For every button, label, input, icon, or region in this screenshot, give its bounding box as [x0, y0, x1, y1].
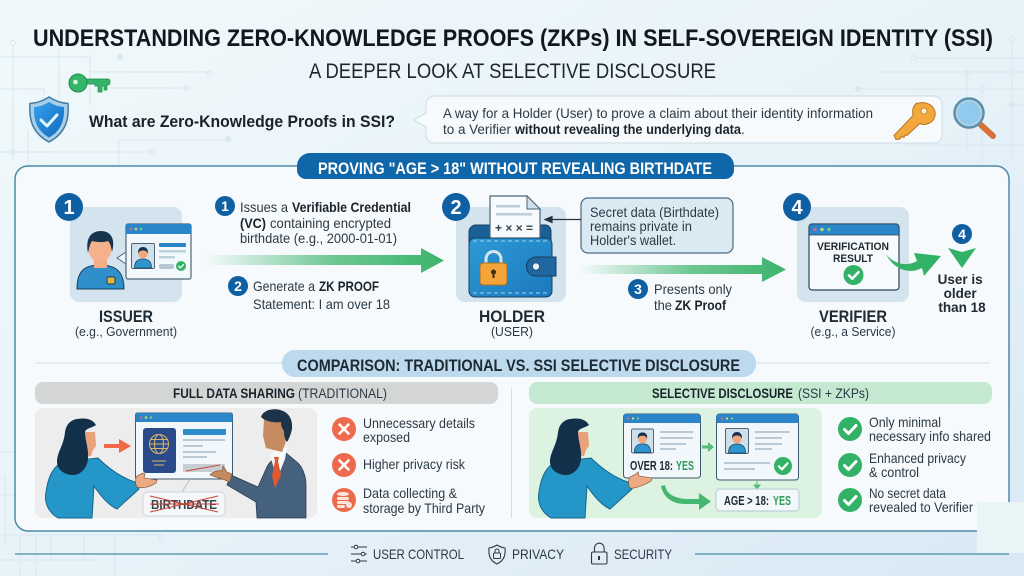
item: minimal info: necessary info shared [869, 428, 991, 444]
step 1 text: Verifiable Credential [292, 199, 411, 215]
small arrow across [702, 442, 714, 452]
verifier label: VERIFIER [819, 308, 887, 326]
definition text: . [741, 121, 745, 137]
item: unnecessary details [332, 415, 475, 445]
small arrow down [754, 481, 760, 489]
traditional header [35, 382, 498, 404]
icon: green key [69, 74, 110, 92]
definition text: to a Verifier [443, 121, 511, 137]
badge 2 [442, 193, 470, 221]
red arrow [104, 439, 131, 453]
verification window: VERIFICATION [817, 241, 889, 253]
selective header: (SSI + ZKPs) [798, 386, 869, 401]
item: no secret data: No secret data [869, 485, 946, 501]
heading banner: comparison: COMPARISON: TRADITIONAL VS. SSI SELECTIVE DISCLOSURE [297, 357, 740, 375]
item: higher risk: Higher privacy risk [363, 456, 466, 472]
verifier [783, 193, 909, 339]
panel: main process [15, 166, 1009, 531]
arrow: holder to verifier [580, 257, 786, 282]
footer: security: SECURITY [614, 546, 673, 562]
item: enhanced privacy: & control [869, 464, 919, 480]
step 1 text: (VC) [240, 215, 266, 231]
divider lines [35, 362, 990, 364]
step 1 text: birthdate (e.g., 2000-01-01) [240, 230, 397, 246]
badge 2: 2 [450, 197, 462, 219]
man [210, 409, 306, 518]
footer: user control: USER CONTROL [373, 546, 464, 562]
woman's hand [136, 473, 157, 488]
woman [46, 419, 139, 518]
panel: full data sharing [35, 382, 498, 518]
age chip: YES [773, 494, 791, 508]
item: minimal info [838, 414, 991, 444]
result text: User is [938, 272, 983, 287]
hand [628, 472, 652, 488]
step 1 text: Issues a [240, 199, 288, 215]
selective header: SELECTIVE DISCLOSURE [652, 386, 793, 401]
document [490, 196, 540, 245]
footer: user control [351, 545, 464, 563]
verifier tile [797, 207, 909, 302]
definition callout [414, 96, 942, 143]
heading banner: proving age [297, 153, 734, 179]
traditional list [332, 415, 485, 516]
birthdate chip [143, 479, 225, 516]
step 2 text: 2 [234, 278, 242, 294]
footer: security [592, 543, 673, 564]
badge 4 small [952, 224, 972, 244]
footer: privacy [489, 545, 565, 564]
issuer [55, 193, 191, 339]
curved green arrow [661, 485, 711, 510]
holder tile [456, 207, 566, 302]
traditional illustration [35, 408, 317, 518]
result [938, 224, 986, 315]
issuer credential window [117, 224, 191, 279]
wallet back [469, 225, 551, 297]
step 1 text: 1 [221, 198, 229, 214]
icon: orange key [894, 103, 935, 140]
item: data collecting [332, 485, 485, 516]
arrow: issuer to holder [205, 248, 444, 273]
step 3 text: Presents only [654, 281, 732, 297]
footer: privacy: PRIVACY [512, 546, 565, 562]
credential window 1: YES [676, 459, 694, 473]
issuer label: ISSUER [99, 308, 153, 326]
passport window [136, 413, 233, 479]
credential window 1: OVER 18: [630, 459, 673, 473]
step 3 text: ZK Proof [675, 297, 726, 313]
definition text: without revealing the underlying data [514, 121, 741, 137]
credential window 2 [716, 414, 799, 480]
callout: secret data [581, 198, 733, 253]
footer lines [15, 553, 1009, 555]
document: + × × = [495, 221, 533, 235]
item: enhanced privacy [838, 450, 966, 480]
item: enhanced privacy: Enhanced privacy [869, 450, 966, 466]
holder sublabel: (USER) [491, 324, 533, 339]
heading banner: proving age: PROVING "AGE > 18" WITHOUT REVEALING BIRTHDATE [318, 160, 712, 178]
item: higher risk [332, 453, 466, 477]
vertical divider [510, 388, 512, 518]
selective list [838, 414, 991, 515]
issuer tile [70, 207, 182, 302]
arrow: verifier result curve [886, 253, 941, 276]
selective header [529, 382, 992, 404]
callout: secret data: Secret data (Birthdate) [590, 204, 719, 220]
result text: than 18 [938, 300, 986, 315]
item: no secret data [838, 485, 973, 515]
item: no secret data: revealed to Verifier [869, 499, 973, 515]
step 3 text [628, 279, 736, 313]
issuer person [77, 231, 124, 289]
step 2 text [228, 276, 390, 312]
age chip: AGE > 18: [724, 494, 769, 508]
credential window 1 [624, 414, 701, 478]
down chevron [948, 248, 976, 268]
step 2 text: Statement: I am over 18 [253, 296, 390, 312]
padlock [480, 252, 507, 285]
issuer sublabel: (e.g., Government) [75, 324, 177, 339]
panel: selective disclosure [529, 382, 992, 518]
item: data collecting: Data collecting & [363, 485, 458, 501]
holder label: HOLDER [479, 308, 545, 326]
heading: what are ZKPs: What are Zero-Knowledge Proofs in SSI? [89, 112, 395, 131]
wallet front [469, 238, 556, 297]
icon: magnifier [954, 98, 993, 136]
corner patch [977, 502, 1024, 553]
arrow: callout to document [545, 216, 581, 222]
badge 4 digit: 4 [958, 226, 966, 242]
selective illustration [529, 408, 822, 518]
item: data collecting: storage by Third Party [363, 500, 485, 516]
step 2 text: Generate a [253, 278, 315, 294]
step 2 text: ZK PROOF [319, 278, 379, 294]
item: unnecessary details: Unnecessary details [363, 415, 475, 431]
definition text: A way for a Holder (User) to prove a claim about their identity information [443, 105, 873, 121]
age chip [716, 489, 799, 511]
verifier sublabel: (e.g., a Service) [810, 324, 896, 339]
traditional header: (TRADITIONAL) [298, 386, 387, 401]
step 3 text: 3 [634, 281, 642, 297]
icon: shield [30, 97, 68, 142]
item: unnecessary details: exposed [363, 429, 410, 445]
heading banner: comparison [282, 350, 756, 377]
woman [538, 419, 632, 518]
badge 4 [783, 193, 811, 221]
item: minimal info: Only minimal [869, 414, 941, 430]
badge 4: 4 [791, 197, 803, 219]
callout: secret data: remains private in [590, 218, 692, 234]
badge 1 [55, 193, 83, 221]
holder [442, 193, 566, 339]
verification window [809, 224, 899, 290]
traditional header: FULL DATA SHARING [173, 386, 295, 401]
birthdate chip: BIRTHDATE [151, 497, 217, 512]
step 1 text: containing encrypted [270, 215, 391, 231]
verification window: RESULT [833, 253, 873, 265]
badge 1: 1 [63, 197, 75, 219]
callout: secret data: Holder's wallet. [590, 232, 676, 248]
subtitle: A DEEPER LOOK AT SELECTIVE DISCLOSURE [309, 60, 716, 83]
step 3 text: the [654, 297, 672, 313]
step 1 text [215, 196, 415, 246]
result text: older [944, 286, 977, 301]
